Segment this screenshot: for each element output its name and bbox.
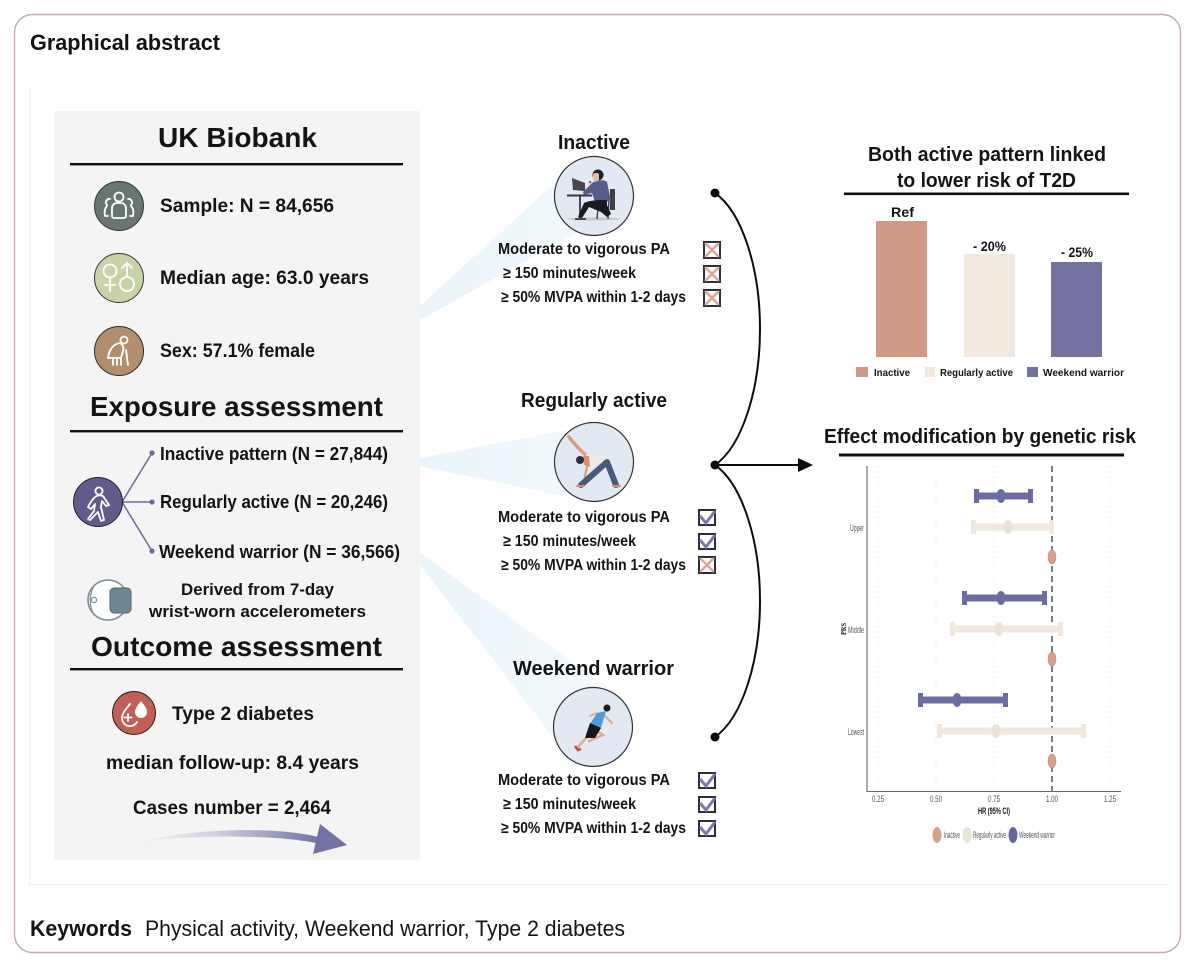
text: accelerometer note: wrist-worn accelerometers [148,603,366,621]
icon: group of people [94,182,144,230]
keywords: Keywords [30,916,132,941]
axis labels: x: 0.50 [930,794,942,805]
icon: check box [699,797,715,812]
heading: bar chart [868,144,1106,192]
text: outcome: Type 2 diabetes [172,703,314,725]
icon: person at desk [554,156,634,236]
text: follow-up: median follow-up: 8.4 years [106,752,359,774]
bar: inactive [876,221,927,357]
bar chart panel [844,144,1129,379]
axis labels: x: 0.75 [988,794,1000,805]
text: inactive group size: Inactive pattern (N = 27,844) [160,443,388,464]
icon: yoga pose [554,422,634,502]
axis labels: x: 1.25 [1104,794,1116,805]
labels: bar values: - 20% [973,238,1006,254]
heading: bar chart: to lower risk of T2D [897,170,1076,192]
axis labels: y [840,523,864,738]
axis labels: y: Upper [850,523,864,534]
text: criteria: ≥ 50% MVPA within 1-2 days [501,557,686,574]
heading: UK Biobank: UK Biobank [158,122,317,153]
legend: bar chart: Weekend warrior [1043,367,1124,379]
icon: walking person [74,478,122,526]
text: median age: Median age: 63.0 years [160,267,369,289]
heading: bar chart: Both active pattern linked [868,144,1106,166]
axis labels: y: Lowest [848,727,864,738]
series: regularly active intervals [937,520,1086,738]
heading: forest plot: Effect modification by genetic risk [824,426,1137,448]
text: criteria: ≥ 150 minutes/week [503,796,636,813]
labels: bar values: - 25% [1061,244,1093,260]
bar: regularly active [964,254,1015,357]
group: regularly active [498,390,715,574]
text: criteria: Moderate to vigorous PA [498,241,670,258]
light beam: weekend warrior [420,553,607,737]
axis labels: y: PRS [840,623,848,635]
diagram: exposure branches [122,450,155,554]
text: criteria: ≥ 50% MVPA within 1-2 days [501,820,686,837]
icon: cross box [699,557,715,573]
series: inactive reference points [1048,550,1056,768]
icon: wrist-worn accelerometer [88,580,131,620]
legend: bar chart: Inactive [874,367,910,379]
text: criteria: Moderate to vigorous PA [498,772,670,789]
text: sex: Sex: 57.1% female [160,340,315,362]
text: regularly active group size: Regularly active (N = 20,246) [160,491,388,512]
title: Graphical abstract [30,30,221,55]
text: sample size: Sample: N = 84,656 [160,195,334,217]
heading: Exposure assessment: Exposure assessment [90,391,383,422]
icon: gender symbols [94,254,144,302]
axis labels: y: Middle [848,625,864,636]
axis labels: x: HR (95% CI) [978,806,1010,816]
text: accelerometer note [148,581,366,621]
legend: forest plot: Regularly active [973,830,1006,841]
labels: bar values: Ref [891,204,914,220]
icon: cross box [704,290,720,306]
icon: check box [699,821,715,836]
bar: weekend warrior [1051,262,1102,357]
text: criteria [498,772,686,837]
legend: forest plot: Weekend warrior [1019,830,1055,841]
axis labels: x: 1.00 [1046,794,1058,805]
icon: check box [699,534,715,549]
text: criteria [498,509,686,574]
axis labels: x [872,794,1116,816]
arrow: gradient arrow [140,824,347,854]
forest plot panel [824,426,1137,843]
group: inactive [498,132,720,306]
text: accelerometer note: Derived from 7-day [181,581,335,599]
axis labels: x: 0.25 [872,794,884,805]
icon: cross box [704,242,720,258]
icon: check box [699,510,715,525]
text: criteria: Moderate to vigorous PA [498,509,670,526]
heading: Inactive: Inactive [558,132,630,154]
icon: runner [554,688,632,766]
legend: bar chart: Regularly active [940,367,1013,379]
text: criteria: ≥ 150 minutes/week [503,265,636,282]
heading: Regularly active: Regularly active [521,390,667,412]
text: weekend warrior group size: Weekend warrior (N = 36,566) [159,541,400,562]
heading: Weekend warrior: Weekend warrior [513,658,674,680]
group: weekend warrior [498,658,715,837]
text: criteria [498,241,686,306]
panel: study summary [54,111,420,860]
keywords: Physical activity, Weekend warrior, Type 2 diabetes [145,916,625,941]
light beam: inactive [420,182,578,320]
legend: forest plot [932,827,1055,843]
arrow: bracket to results [710,188,813,742]
series: weekend warrior intervals [918,489,1047,707]
text: criteria: ≥ 150 minutes/week [503,533,636,550]
icon: elderly person [94,326,144,376]
icon: check box [699,773,715,788]
heading: Outcome assessment: Outcome assessment [91,631,382,662]
icon: cross box [704,266,720,282]
labels: bar values [891,204,1093,260]
text: cases: Cases number = 2,464 [133,797,331,819]
icon: blood drop [112,692,156,734]
light beam: regularly active [420,430,567,497]
legend: forest plot: Inactive [944,830,960,841]
legend: bar chart [856,367,1124,379]
text: criteria: ≥ 50% MVPA within 1-2 days [501,289,686,306]
